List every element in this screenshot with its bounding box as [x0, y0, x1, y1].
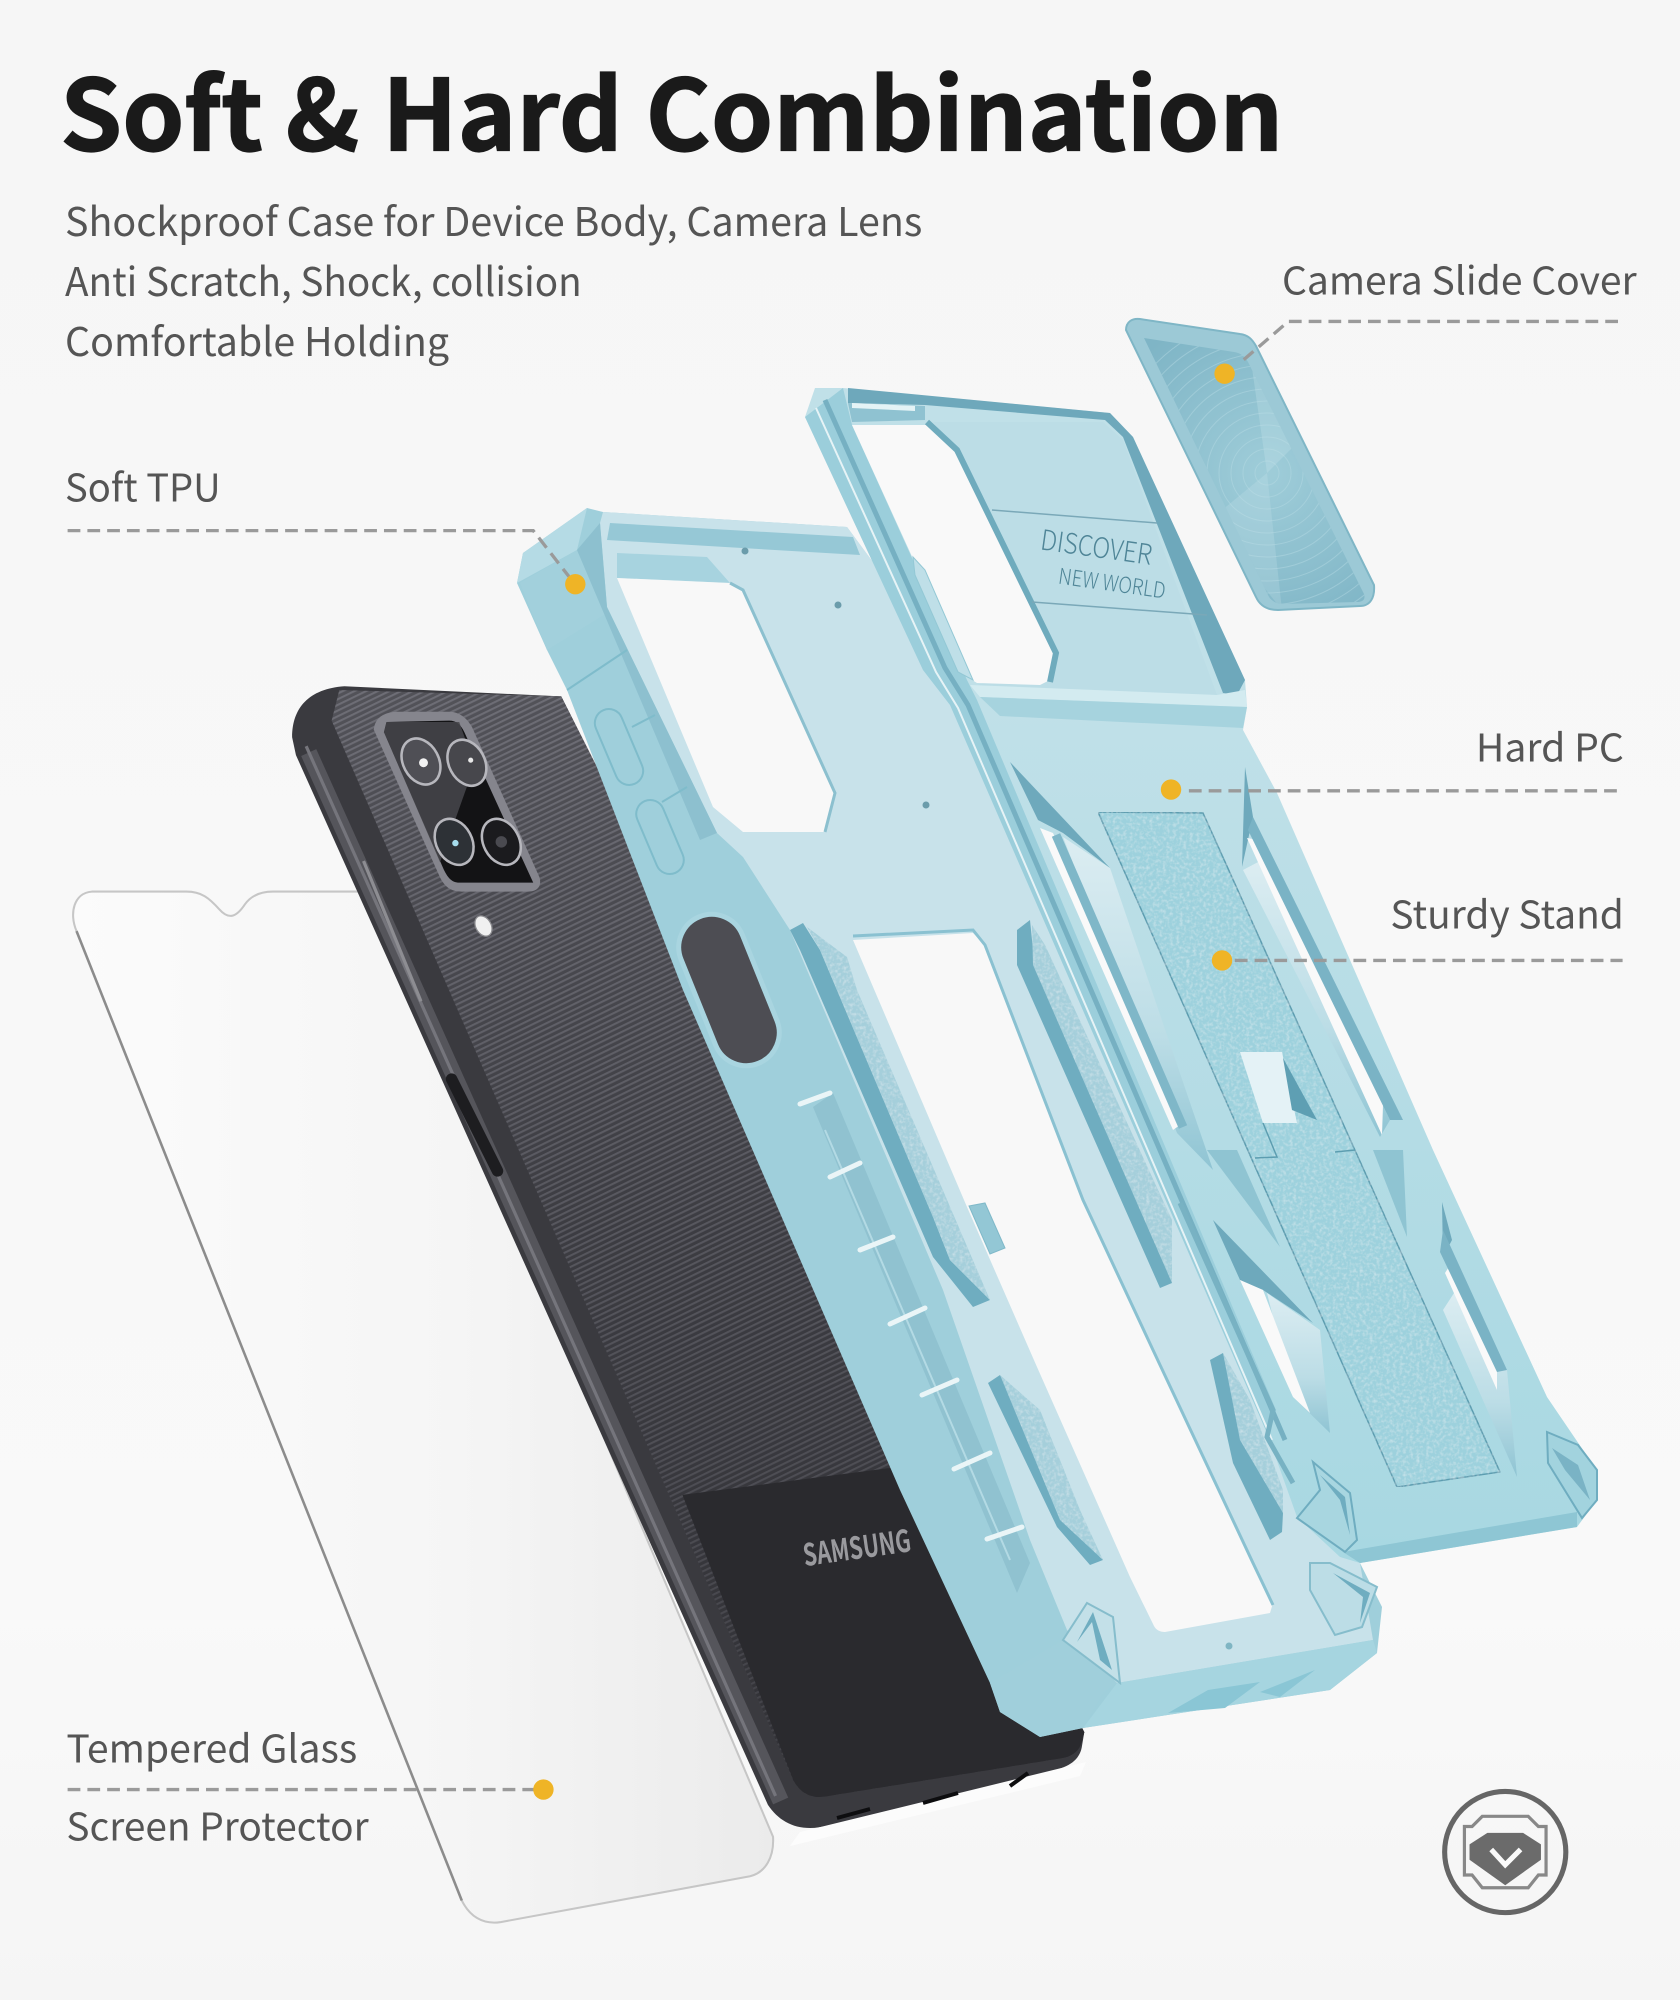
- camera cutout slot: [669, 904, 789, 1076]
- side tab: [969, 1203, 1005, 1254]
- top groove: [607, 523, 860, 555]
- callout: Sturdy Stand: [1212, 886, 1624, 971]
- bottom side face: [1083, 1640, 1377, 1728]
- illustration: camera slide cover: [1125, 318, 1376, 611]
- right corner chevron: [1310, 1563, 1377, 1635]
- soft case hump through window: [913, 557, 973, 680]
- illustration: phone: [292, 686, 1086, 1846]
- left rails: [805, 388, 1276, 1433]
- bottom vents: [1168, 1670, 1315, 1713]
- slot left: [1040, 828, 1180, 1130]
- s-shaped rail: [1180, 1203, 1293, 1483]
- lower spike shading: [1207, 1150, 1280, 1247]
- power key: [452, 1079, 497, 1171]
- right foot: [1547, 1432, 1597, 1518]
- callout: Tempered Glass Screen Protector: Tempered Glass: [66, 1720, 357, 1775]
- left foot: [1297, 1462, 1357, 1552]
- outer frame: [517, 508, 1382, 1737]
- subtitle lines: Anti Scratch, Shock, collision: [65, 251, 582, 308]
- callout: Tempered Glass Screen Protector: Screen Protector: [66, 1798, 369, 1853]
- illustration: soft TPU case: [517, 508, 1382, 1737]
- upper left grip texture: [807, 927, 990, 1300]
- upper panel right: [1243, 860, 1390, 1137]
- embossed text: DISCOVER NEW WORLD: NEW WORLD: [1057, 559, 1168, 605]
- upper panel left: [1063, 837, 1213, 1170]
- window tab: [617, 553, 730, 583]
- lower left grip band: [988, 1375, 1103, 1565]
- lower spike left: [1213, 1220, 1313, 1323]
- callout: Camera Slide Cover: [1214, 252, 1637, 384]
- lower right grip band: [1210, 1353, 1283, 1540]
- textured back panel: [332, 690, 1084, 1797]
- subtitle lines: Comfortable Holding: [65, 311, 449, 368]
- cover rim: [1126, 319, 1374, 610]
- camera recess wall: [848, 388, 1245, 695]
- lower left grip texture: [1000, 1375, 1103, 1560]
- phone body: [292, 686, 1084, 1828]
- illustration: tempered glass screen protector: [73, 892, 773, 1923]
- callout: Soft TPU: Soft TPU: [65, 458, 221, 513]
- callout: Tempered Glass Screen Protector: [66, 1720, 554, 1853]
- upper window: [617, 578, 835, 832]
- stand hinge: [1240, 1052, 1355, 1158]
- lower right grip texture: [1223, 1353, 1283, 1513]
- camera module: [374, 712, 540, 892]
- slot right: [1247, 838, 1383, 1135]
- lower panel left: [1267, 1293, 1330, 1433]
- bottom edge band: [1343, 1512, 1577, 1563]
- shoulder faces: [517, 508, 587, 583]
- camera window: [852, 425, 1053, 685]
- lower slot right: [1445, 1262, 1497, 1390]
- light inner plate: [600, 512, 1373, 1683]
- textured stand: [1098, 812, 1500, 1487]
- upper spike left: [1010, 762, 1110, 868]
- lower slot left: [1240, 1280, 1310, 1413]
- upper left grip band: [790, 923, 990, 1307]
- camera lenses: [394, 732, 528, 872]
- callout: Soft TPU: [65, 458, 586, 594]
- lower panel right: [1443, 1290, 1517, 1477]
- body: [805, 388, 1597, 1563]
- callout: Sturdy Stand: Sturdy Stand: [1390, 886, 1624, 941]
- upper spike right: [1242, 767, 1253, 867]
- bottom ports and protector edge: [790, 1762, 1086, 1846]
- upper right grip band: [1017, 920, 1172, 1288]
- subtitle lines: Shockproof Case for Device Body, Camera Lens: [65, 191, 922, 248]
- samsung logo: SAMSUNG: [800, 1515, 913, 1575]
- smooth lower panel: [682, 1467, 1084, 1797]
- subtitle lines: [65, 191, 922, 368]
- embossed text: DISCOVER NEW WORLD: [1038, 519, 1168, 605]
- button recesses: [567, 650, 688, 878]
- callout: Camera Slide Cover: Camera Slide Cover: [1282, 252, 1637, 307]
- callout: Hard PC: [1161, 718, 1624, 800]
- concentric rings and reflections: [1156, 344, 1364, 604]
- embossed text: DISCOVER NEW WORLD: DISCOVER: [1038, 519, 1155, 574]
- metal disc face: [1144, 338, 1365, 604]
- rivets: [1226, 1642, 1233, 1650]
- upper right grip texture: [1032, 925, 1172, 1283]
- lower window: [853, 933, 1273, 1632]
- left corner chevron: [1063, 1603, 1120, 1683]
- illustration: hard PC case: [805, 388, 1597, 1563]
- branding bands: [992, 510, 1207, 615]
- lower spike right: [1442, 1202, 1452, 1257]
- icon: brand badge: [1445, 1791, 1566, 1913]
- camera recess floor: [933, 422, 1217, 695]
- flash: [471, 913, 496, 939]
- callout: Hard PC: Hard PC: [1476, 718, 1624, 773]
- rail ticks: [800, 1093, 1022, 1539]
- rail ribbed band: [813, 1093, 1030, 1593]
- title: Soft & Hard Combination: [60, 38, 1283, 180]
- volume key: [364, 861, 421, 1001]
- frame lower lip: [970, 685, 1247, 707]
